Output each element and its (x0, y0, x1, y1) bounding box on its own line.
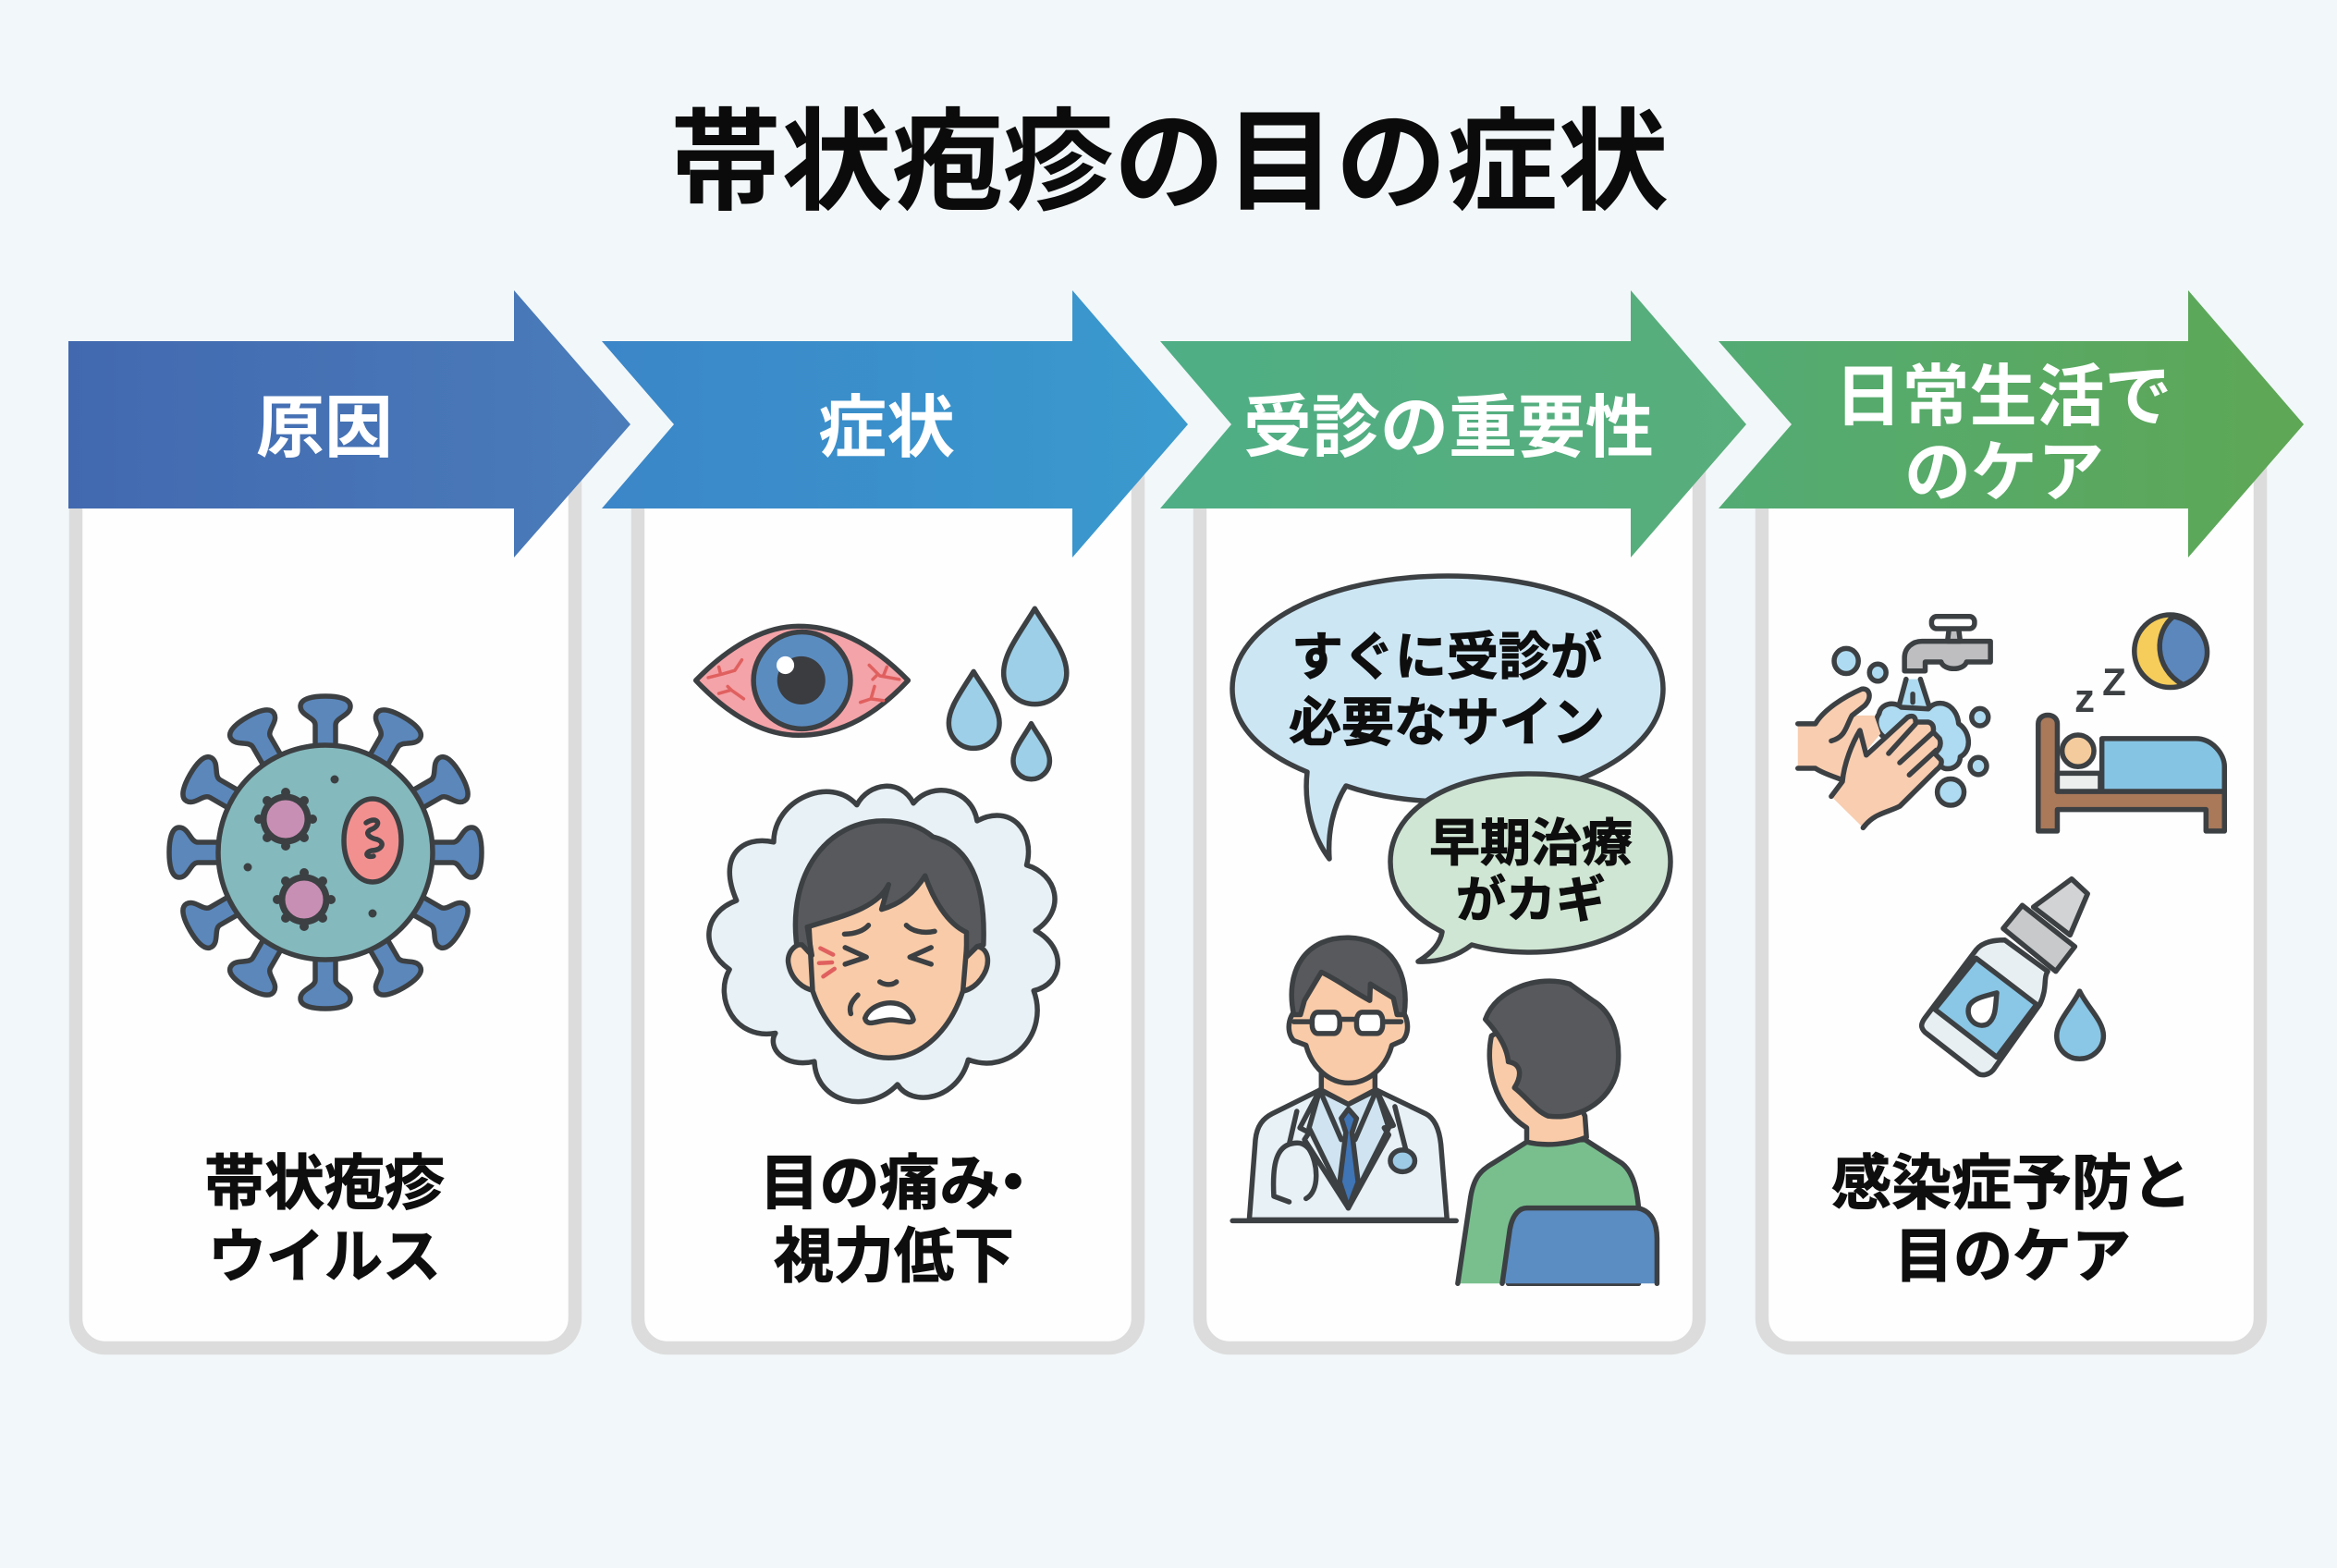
icon: virus (169, 696, 482, 1009)
text: 目の痛み・視力低下: 視力低下 (774, 1222, 1014, 1290)
panel: 受診の重要性 card (1200, 453, 1699, 1348)
speech bubble: すぐに受診が必要なサイン: すぐに受診が (1291, 628, 1602, 686)
icon: patient face in pain cloud (709, 786, 1058, 1102)
panel: 原因 card (76, 462, 575, 1348)
speech bubble: すぐに受診が必要なサイン: 必要なサイン (1289, 693, 1605, 753)
text: 感染症予防と目のケア (1831, 1149, 2192, 1290)
panel: 症状 card (638, 462, 1138, 1348)
arrow: 症状: 症状 (818, 389, 955, 466)
title: 帯状疱疹の目の症状 (670, 101, 1669, 225)
icon: doctor (1232, 937, 1456, 1220)
speech bubble: すぐに受診が必要なサイン (1232, 576, 1663, 859)
icon: sleeping in bed with moon: Z (2102, 660, 2126, 704)
arrow: 受診の重要性: 受診の重要性 (1243, 389, 1654, 466)
arrow: 受診の重要性 (1160, 290, 1746, 557)
icon: sleeping in bed with moon: z (2074, 676, 2095, 721)
icon: eye drops bottle (1922, 879, 2103, 1075)
arrow: 症状 (602, 290, 1188, 557)
text: 感染症予防と目のケア: 目のケア (1894, 1223, 2131, 1290)
icon: patient seen from behind (1458, 981, 1657, 1283)
text: 目の痛み・視力低下: 目の痛み・ (759, 1149, 1044, 1217)
icon: sleeping in bed with moon (2038, 615, 2224, 831)
arrow: 日常生活でのケア: のケア (1904, 436, 2104, 510)
arrow: 原因: 原因 (256, 389, 393, 466)
arrow: 日常生活でのケア (1719, 290, 2304, 557)
icon: bloodshot eye (696, 626, 908, 735)
text: 帯状疱疹ウイルス: 帯状疱疹 (204, 1149, 445, 1217)
arrow: 日常生活でのケア: 日常生活で (1834, 360, 2172, 435)
speech bubble: 早期治療がカギ: 早期治療 (1429, 815, 1633, 872)
speech bubble: 早期治療がカギ (1390, 774, 1670, 962)
text: 帯状疱疹ウイルス: ウイルス (208, 1225, 441, 1290)
icon: tear drops (948, 608, 1067, 779)
icon: hand washing (1798, 617, 1990, 827)
text: 帯状疱疹ウイルス (204, 1149, 445, 1290)
panel: 日常生活でのケア card (1762, 453, 2260, 1348)
arrow: 原因 (68, 290, 630, 557)
speech bubble: 早期治療がカギ: がカギ (1456, 873, 1606, 928)
text: 感染症予防と目のケア: 感染症予防と (1831, 1149, 2192, 1217)
text: 目の痛み・視力低下 (759, 1149, 1044, 1290)
